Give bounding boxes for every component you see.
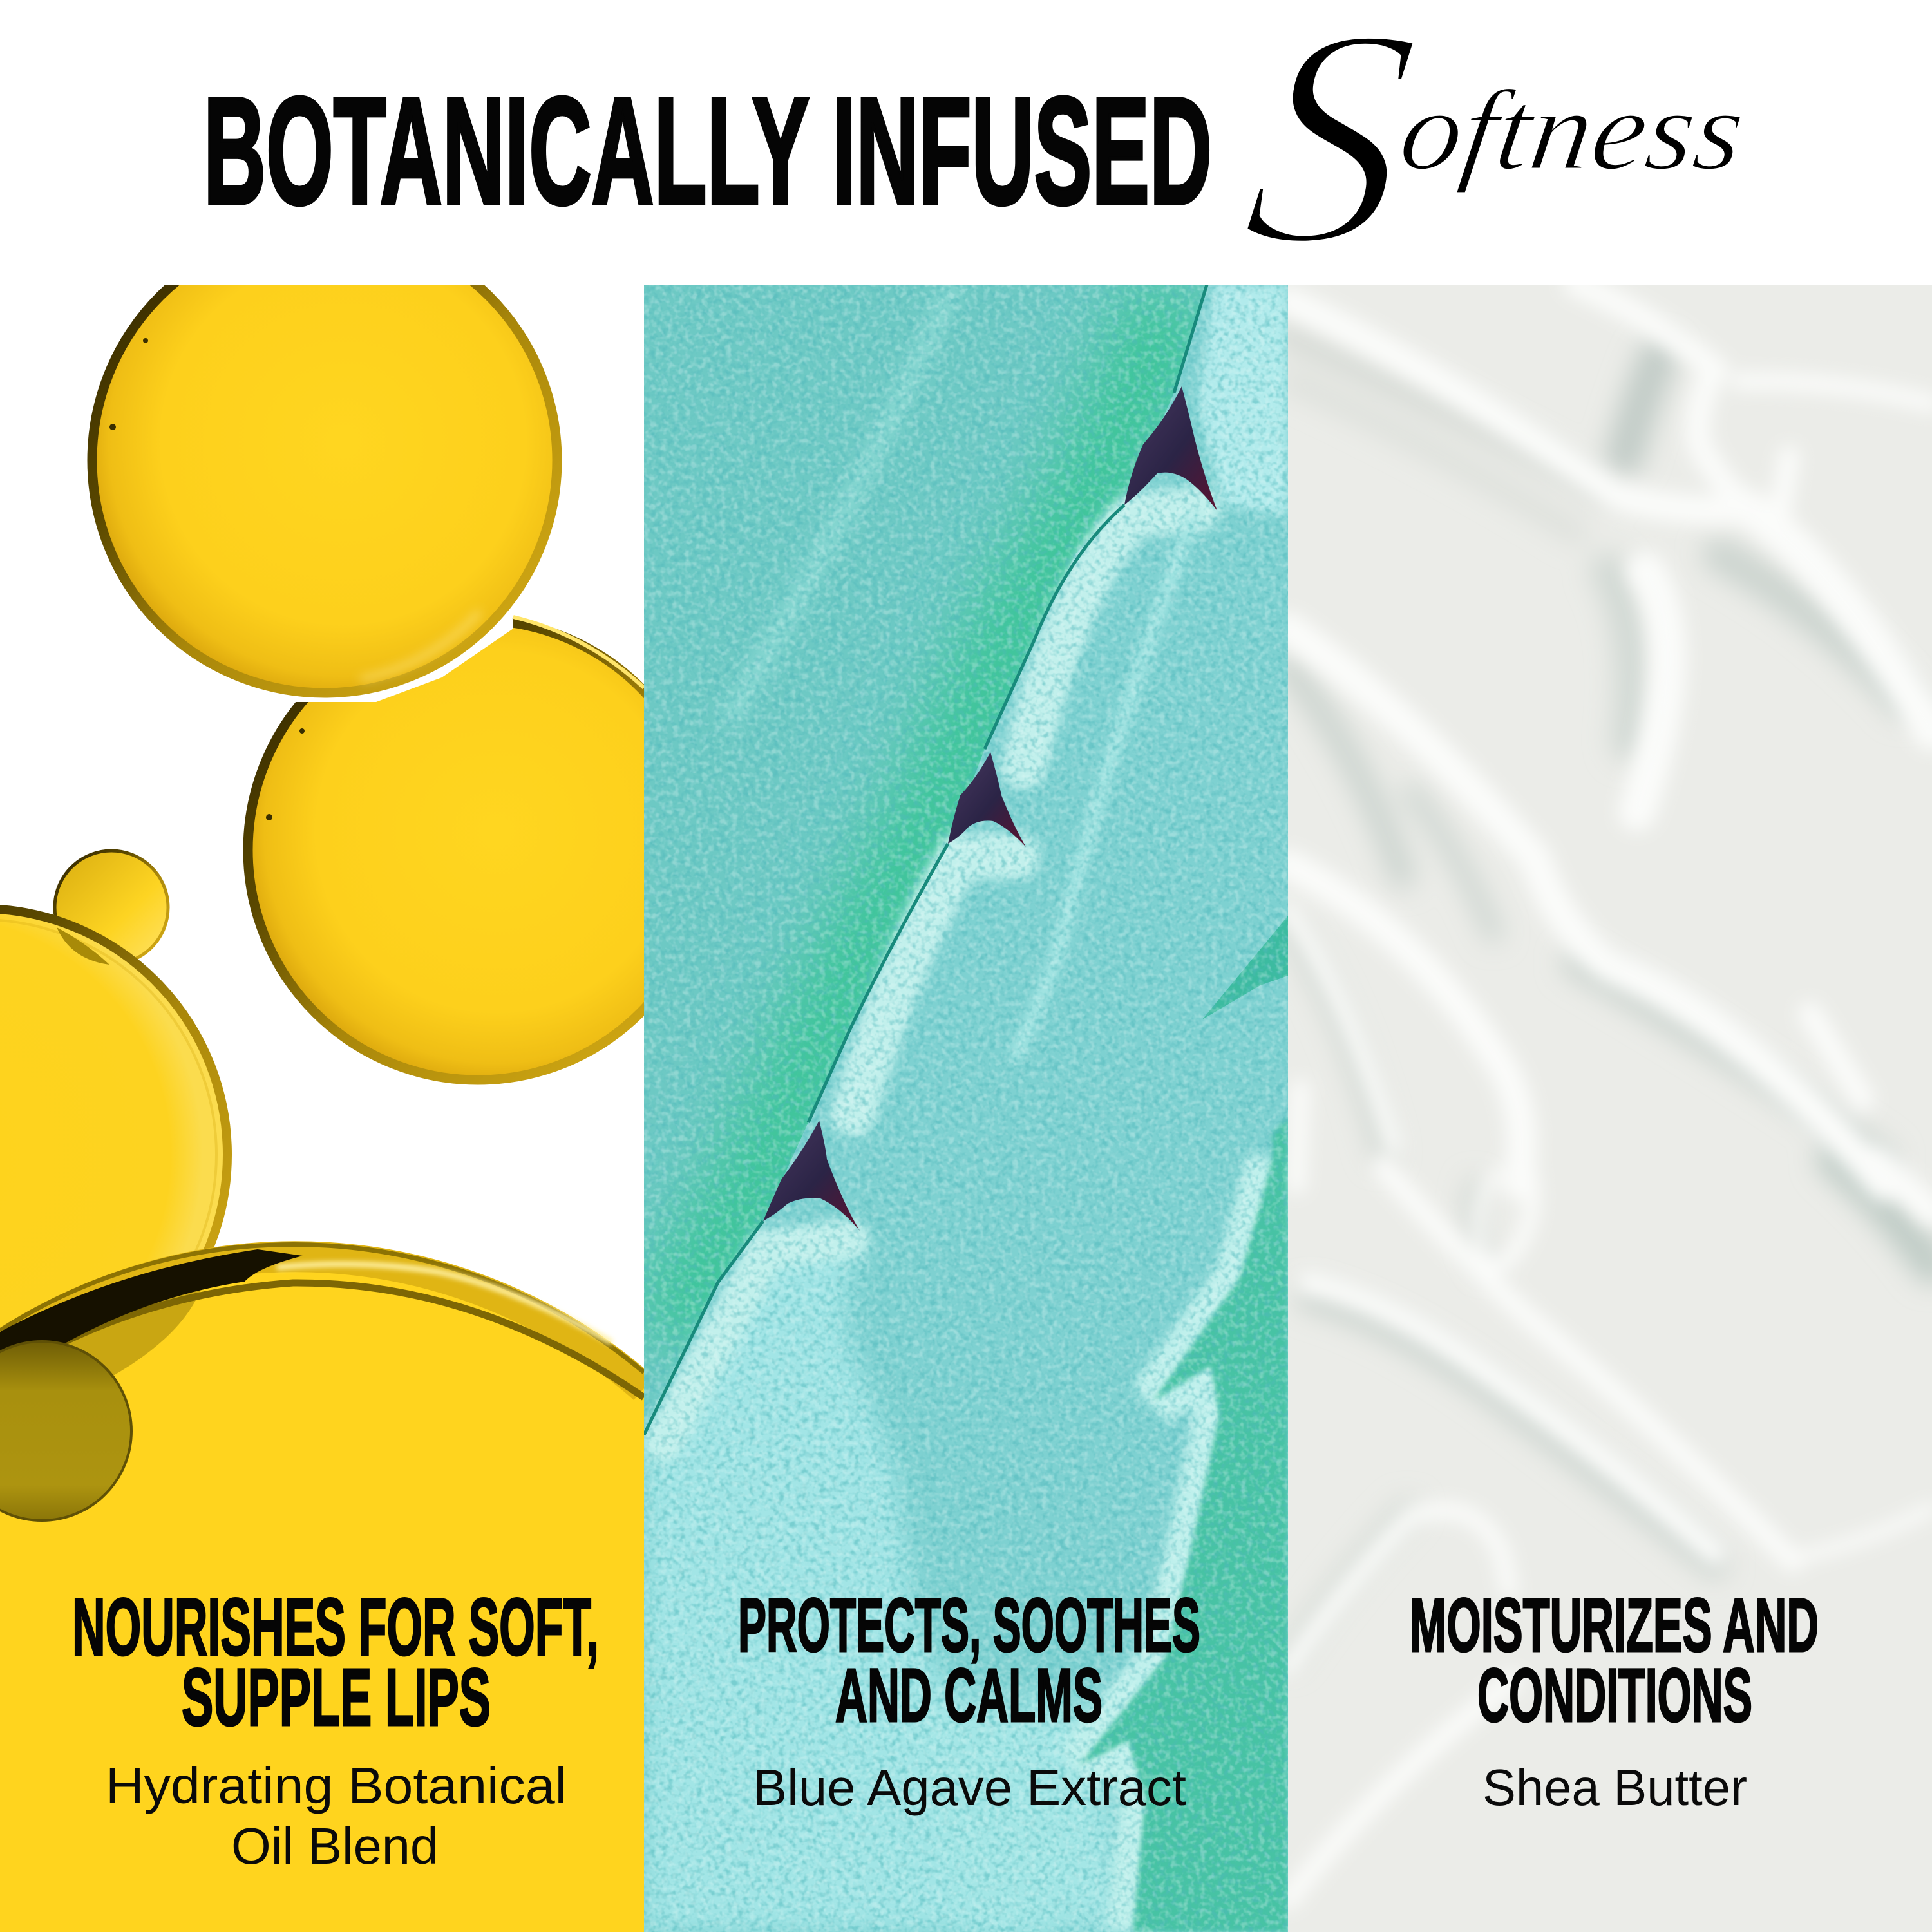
script word: softness: oftness — [1393, 67, 1752, 194]
caption: protects: PROTECTS, SOOTHES — [738, 1583, 1200, 1668]
agave green right side — [1079, 1117, 1288, 1932]
panel: shea butter — [1288, 283, 1932, 1932]
oil droplet: small dark — [0, 1341, 132, 1521]
agave right leaf — [644, 285, 1288, 1932]
agave texture light — [644, 285, 1288, 1932]
oil droplet: right — [243, 615, 644, 1084]
caption: protects — [738, 1583, 1200, 1816]
caption: nourishes: SUPPLE LIPS — [182, 1652, 491, 1743]
agave left faint creases — [728, 285, 953, 721]
heading: botanically infused: BOTANICALLY INFUSED — [204, 66, 1212, 236]
panel: hydrating botanical oil blend — [0, 285, 644, 1932]
thorn 3 — [763, 1121, 860, 1231]
agave pale leaf bottom — [644, 1236, 1056, 1932]
agave green notch — [1202, 916, 1288, 1019]
oil droplet: tiny — [55, 851, 168, 964]
agave pale lower centre — [902, 1687, 1133, 1932]
agave pale edge of green — [1079, 1159, 1273, 1932]
caption: nourishes — [72, 1582, 599, 1875]
panel: blue agave extract — [644, 285, 1288, 1932]
caption: nourishes: NOURISHES FOR SOFT, — [72, 1582, 599, 1672]
caption: protects: Blue Agave Extract — [753, 1759, 1186, 1816]
overlap with left droplet — [0, 1289, 201, 1404]
agave green glow — [670, 296, 1179, 1340]
title — [204, 0, 1766, 309]
caption: moisturizes — [1410, 1583, 1819, 1816]
caption: moisturizes: Shea Butter — [1482, 1759, 1747, 1816]
cream highlights — [1288, 283, 1932, 1900]
script word: softness — [1228, 0, 1766, 309]
agave ridge pale strips — [663, 509, 1198, 1443]
agave ridge line — [644, 285, 1207, 1435]
dark rim segment — [0, 1249, 303, 1385]
caption: nourishes: Hydrating Botanical — [106, 1757, 567, 1814]
tiny droplet overlap — [57, 927, 109, 965]
thorn 2 — [948, 752, 1026, 847]
oil droplet: left — [0, 905, 232, 1328]
white cut between droplets — [296, 617, 513, 702]
agave texture — [644, 285, 1288, 1932]
cream shadows — [1288, 335, 1932, 1658]
caption: protects: AND CALMS — [835, 1653, 1103, 1738]
thorn 1 — [1124, 386, 1217, 511]
caption: nourishes: Oil Blend — [231, 1817, 439, 1875]
rim band — [0, 1256, 644, 1388]
oil droplet: large bottom — [0, 1243, 644, 1932]
agave upper right pale — [1198, 285, 1288, 515]
oil droplet: top — [92, 228, 557, 693]
agave diagonal pale crease — [1014, 513, 1195, 1059]
